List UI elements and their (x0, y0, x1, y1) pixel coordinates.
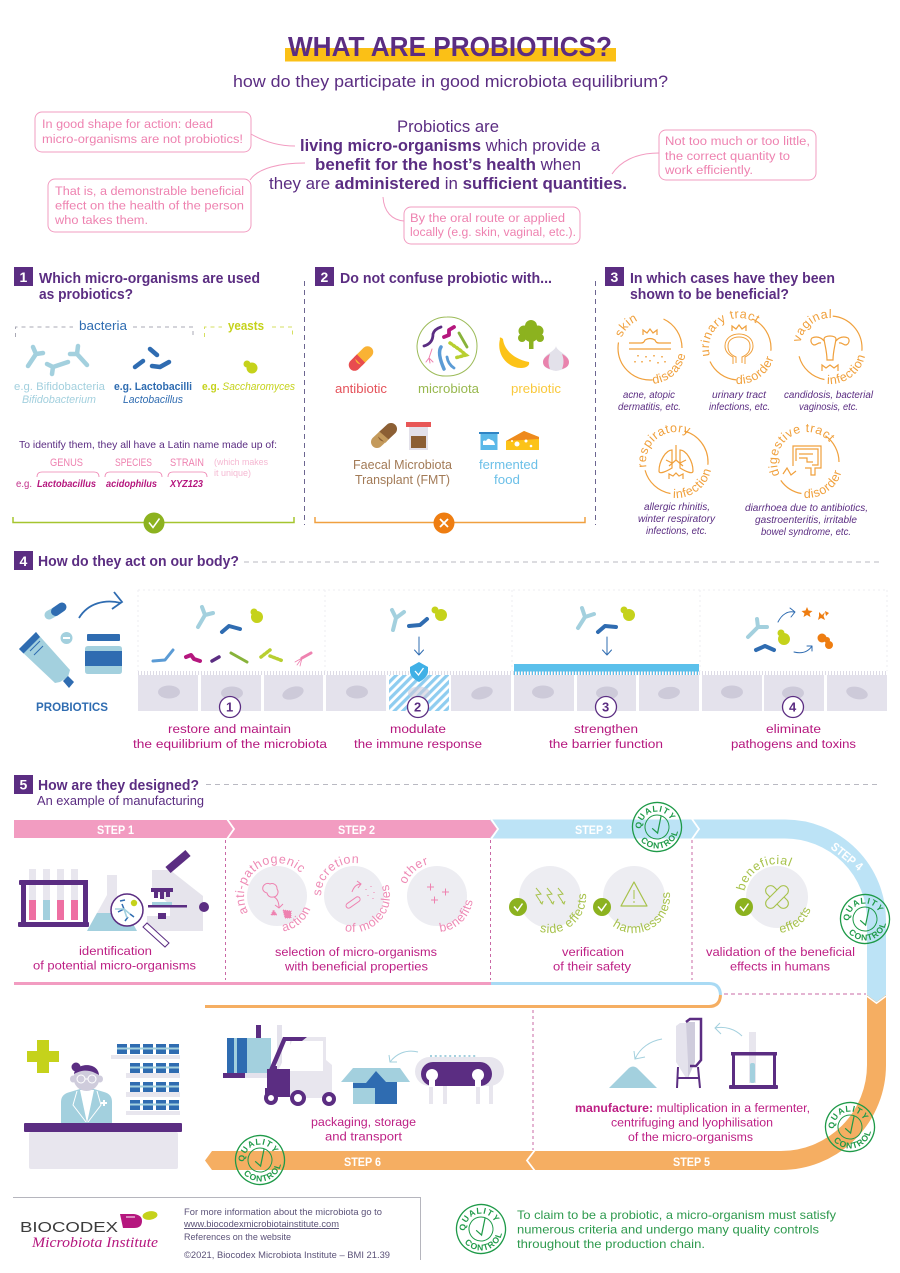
definition text: they are administered in sufficient quantities. (269, 175, 627, 193)
section 5 heading: How are they designed? (38, 778, 199, 794)
step labels: STEP 2 (338, 823, 375, 837)
callout: demonstrable effect: That is, a demonstrable beneficial (55, 184, 244, 198)
label (731, 722, 856, 751)
label: the barrier function (549, 737, 663, 751)
captions: indications: infections, etc. (646, 526, 707, 537)
label: with beneficial properties (284, 960, 428, 974)
callout: correct quantity: work efficiently. (664, 163, 753, 177)
arrow (79, 592, 122, 618)
panel 4.3: barrier function (514, 606, 699, 751)
step labels: STEP 3 (575, 823, 612, 837)
icon: capsule (49, 607, 62, 615)
label: antibiotic: antibiotic (335, 382, 387, 396)
callout: oral route (383, 197, 580, 244)
icon: other benefits: benefits (439, 900, 472, 932)
yeasts bracket: yeasts (228, 318, 264, 333)
panel 4.2: immune response (354, 606, 482, 751)
label (133, 722, 327, 751)
footer text: For more information about the microbiota go to (184, 1207, 382, 1218)
captions: indications: candidosis, bacterial (784, 390, 874, 401)
icon: vaginal infection (794, 309, 865, 384)
label: bifidobacteria: Bifidobacterium (22, 394, 96, 406)
section 1 heading: Which micro-organisms are used (39, 271, 260, 287)
icon: shield (410, 662, 428, 682)
stamp: quality control step 3: CONTROL (642, 832, 678, 848)
footer (13, 1198, 420, 1261)
label: effects in humans (730, 960, 830, 974)
subtitle: how do they participate in good microbiota equilibrium? (233, 72, 668, 91)
step number 4 (782, 696, 804, 718)
green validation bar (13, 512, 294, 534)
callout: correct quantity (612, 130, 816, 180)
captions: indications: infections, etc. (709, 402, 770, 413)
icon: vaginal infection: infection (828, 355, 865, 384)
pathogens (802, 607, 833, 649)
icon: microscope (147, 853, 209, 931)
section 4 heading: How do they act on our body? (38, 554, 239, 570)
microbes (392, 610, 427, 655)
icon: skin disease (616, 316, 685, 384)
step number 2 (408, 696, 428, 718)
callout: dead micro-organisms (35, 112, 295, 152)
logo: Biocodex: Microbiota Institute (31, 1235, 159, 1251)
callout: oral route: locally (e.g. skin, vaginal, etc.). (410, 225, 576, 239)
barrier layer (514, 664, 699, 673)
icon: other benefits: other (401, 858, 426, 884)
panel: step 5 manufacture (575, 1019, 810, 1144)
label: lactobacilli (114, 381, 192, 406)
latin name explanation (16, 439, 277, 490)
label: strengthen (574, 722, 638, 736)
step number 4: 4 (789, 700, 797, 714)
shelves with products (111, 1044, 180, 1115)
stamp: footer quality control: CONTROL (466, 1234, 502, 1250)
section 1 heading: as probiotics? (39, 287, 133, 303)
section 2 heading: 2 (320, 269, 328, 285)
definition text: benefit for the host’s health when (315, 156, 581, 174)
label: FMT: Transplant (FMT) (355, 473, 450, 487)
icon: harmlessness: harmlessness (613, 892, 670, 934)
icon: beneficial effects: effects (780, 908, 810, 932)
icon: fermenter (676, 1019, 701, 1088)
icon: skin disease: disease (652, 354, 685, 384)
icon: harmlessness (603, 866, 670, 934)
footer text: www.biocodexmicrobiotainstitute.com (183, 1219, 339, 1230)
latin name explanation: (which makes (214, 457, 268, 467)
label: modulate (390, 722, 446, 736)
logo: Biocodex (20, 1210, 159, 1251)
stamp: quality control step 6: CONTROL (244, 1164, 281, 1182)
band: step 4 and 3 (490, 829, 876, 995)
label: bifidobacteria: e.g. Bifidobacteria (14, 381, 106, 393)
icon: anti-pathogenic action: anti-pathogenic (235, 856, 304, 914)
section 3 heading: In which cases have they been (630, 271, 835, 287)
section 1 heading (14, 267, 260, 303)
panel 4.1: restore equilibrium (133, 607, 327, 751)
footer text (183, 1207, 390, 1261)
counter (24, 1123, 182, 1169)
icon: check beneficial (735, 898, 753, 916)
icon: flask (87, 875, 137, 931)
stamp: quality control step 4 (840, 894, 890, 944)
panel 2: do not confuse (315, 317, 585, 534)
section 4 heading (14, 551, 882, 570)
icon: bifidobacteria (28, 346, 87, 374)
icon: green cross (27, 1040, 59, 1073)
label: validation of the beneficial (706, 945, 855, 959)
callout: correct quantity: Not too much or too little, (665, 134, 810, 148)
captions: indications: urinary tract (712, 390, 767, 401)
icon: check side effects (509, 898, 527, 916)
step number 1: 1 (226, 700, 233, 714)
label: the equilibrium of the microbiota (133, 737, 327, 751)
callout: correct quantity: the correct quantity to (665, 149, 790, 163)
captions: indications: gastroenteritis, irritable (755, 515, 857, 526)
icon: side effects (519, 866, 586, 934)
latin name explanation: e.g. (16, 478, 32, 490)
icon: respiratory infection: respiratory (639, 425, 690, 467)
callout: demonstrable effect: effect on the health of the person (55, 198, 244, 212)
icon: test tube rack (18, 869, 89, 927)
panel 4.4: eliminate pathogens (731, 607, 856, 751)
stamp: quality control step 5: QUALITY (828, 1106, 869, 1128)
icon: powder pile (609, 1066, 657, 1088)
icon: test tube rack (729, 1032, 778, 1089)
panel: step 4 validation (706, 855, 855, 974)
connecting rounded line (14, 982, 491, 985)
icon: other benefits (401, 858, 472, 932)
step labels: STEP 6 (344, 1155, 381, 1169)
icon: pharmacist (61, 1062, 112, 1123)
icon: urinary tract disorder: urinary tract (700, 310, 760, 356)
stamp: quality control step 6: QUALITY (238, 1138, 279, 1162)
callout: demonstrable effect (48, 163, 305, 232)
panel 3: indications (616, 309, 874, 538)
label: FMT (353, 458, 452, 487)
icon: yogurt and cheese (479, 431, 539, 450)
callout: demonstrable effect: who takes them. (54, 213, 148, 227)
footer note: numerous criteria and undergo many quality controls (517, 1222, 819, 1236)
label: fermented food (479, 458, 538, 487)
latin name explanation: acidophilus (106, 478, 157, 490)
label: and transport (325, 1130, 403, 1144)
panel: step 1 identification (18, 853, 209, 972)
step number 2: 2 (414, 700, 421, 714)
step labels: STEP 4 (828, 839, 866, 874)
latin name explanation: XYZ123 (169, 478, 203, 490)
microbes (748, 608, 812, 653)
yeasts bracket (204, 318, 292, 337)
callout: oral route: By the oral route or applied (410, 211, 565, 225)
stamp: quality control step 4: CONTROL (850, 924, 886, 940)
stamp: quality control step 5 (824, 1102, 876, 1152)
microbes (578, 608, 616, 655)
icon: tablet (60, 632, 72, 644)
icon: forklift (223, 1025, 334, 1104)
stamp: quality control step 4: QUALITY (844, 898, 884, 920)
logo: Biocodex: BIOCODEX (20, 1220, 118, 1236)
icon: secretion of molecules: of molecules (346, 885, 390, 932)
stamp: footer quality control: QUALITY (460, 1208, 500, 1230)
icon: digestive tract disorder: digestive tract (768, 424, 834, 476)
section 5 heading: 5 (20, 776, 28, 792)
section 5 heading (14, 775, 880, 808)
captions: indications (618, 390, 874, 538)
title: WHAT ARE PROBIOTICS? (288, 31, 612, 62)
icon: antibiotic capsule (354, 352, 368, 365)
footer note: To claim to be a probiotic, a micro-organism must satisfy (517, 1208, 836, 1222)
icon: tube (19, 632, 74, 688)
captions: indications: bowel syndrome, etc. (761, 527, 851, 538)
label: fermented food: food (494, 473, 520, 487)
icon: microbiota (417, 317, 477, 376)
icon: jar (85, 634, 122, 674)
label: verification (562, 945, 624, 959)
captions: indications: vaginosis, etc. (799, 402, 858, 413)
icon: secretion of molecules (314, 856, 390, 932)
label: FMT: Faecal Microbiota (353, 458, 452, 472)
icon: urinary tract disorder (700, 310, 773, 384)
label: probiotics: PROBIOTICS (36, 700, 108, 714)
icon: respiratory infection: infection (674, 469, 711, 498)
panel 1: micro-organisms (13, 318, 295, 534)
icon: check harmlessness (593, 898, 611, 916)
latin name explanation: GENUS (50, 457, 83, 469)
latin name explanation: STRAIN (170, 457, 204, 469)
band: steps 1 and 2 (14, 820, 497, 838)
icon: conveyor (415, 1056, 504, 1104)
icon: vaginal infection: vaginal (794, 309, 831, 341)
stamp: footer quality control (456, 1204, 506, 1254)
latin name explanation: SPECIES (115, 457, 152, 469)
bacteria bracket: bacteria (79, 318, 128, 333)
panel: pharmacy (24, 1040, 182, 1169)
band: step 6 and 5 (212, 994, 876, 1160)
icon: box (341, 1068, 410, 1104)
label: fermented food: fermented (479, 458, 538, 472)
captions: indications: acne, atopic (623, 390, 675, 401)
step labels (97, 823, 866, 1169)
section 4 heading: 4 (20, 553, 28, 569)
latin name explanation: it unique) (214, 468, 251, 478)
label: microbiota: microbiota (418, 382, 479, 396)
step number 1 (220, 696, 240, 718)
step number 3 (596, 696, 616, 718)
label: eliminate (766, 722, 821, 736)
footer text: ©2021, Biocodex Microbiota Institute – BMI 21.39 (184, 1250, 390, 1261)
icon: lactobacilli (135, 349, 169, 367)
icon: side effects: side effects (540, 894, 586, 934)
label (549, 722, 663, 751)
captions: indications: winter respiratory (638, 514, 716, 525)
section 3 heading (605, 267, 835, 303)
icon: probiotic products (19, 592, 122, 714)
label: centrifuging and lyophilisation (611, 1116, 773, 1130)
latin name explanation: Lactobacillus (37, 478, 96, 490)
icon: beneficial effects: beneficial (736, 855, 792, 890)
footer note (517, 1208, 836, 1251)
icon: urinary tract disorder: disorder (736, 356, 773, 384)
section 2 heading: Do not confuse probiotic with... (340, 271, 552, 287)
definition text: living micro-organisms which provide a (300, 137, 601, 155)
definition text: Probiotics are (397, 118, 499, 136)
label: of potential micro-organisms (33, 958, 196, 972)
latin name explanation: To identify them, they all have a Latin name made up of: (19, 439, 277, 451)
section 1 heading: 1 (20, 269, 28, 285)
section 3 heading: 3 (610, 269, 618, 285)
icon: anti-pathogenic action: action (282, 907, 310, 932)
orange warning bar (315, 512, 585, 534)
label: of their safety (553, 960, 632, 974)
definition text (269, 118, 627, 193)
stamp: quality control step 3 (632, 802, 682, 852)
icon: FMT capsule and cup (377, 422, 431, 450)
label: lactobacilli: e.g. Lactobacilli (114, 381, 192, 393)
stamp: quality control step 3: QUALITY (636, 806, 676, 828)
arrow (634, 1039, 662, 1059)
label: saccharomyces: e.g. Saccharomyces (202, 381, 295, 393)
step labels: STEP 5 (673, 1155, 710, 1169)
icon: skin disease: skin (616, 316, 637, 337)
label (553, 945, 632, 974)
label: identification (79, 944, 152, 958)
microbes (153, 607, 311, 666)
label: pathogens and toxins (731, 737, 856, 751)
label: packaging, storage (311, 1115, 416, 1129)
callout: dead micro-organisms: In good shape for action: dead (42, 117, 213, 131)
label (311, 1115, 416, 1144)
label: of the micro-organisms (628, 1130, 753, 1144)
epithelium cells (138, 673, 887, 711)
label: prebiotic: prebiotic (511, 382, 561, 396)
captions: indications: diarrhoea due to antibiotics, (745, 503, 868, 514)
footer note: throughout the production chain. (517, 1237, 705, 1251)
label: bifidobacteria (14, 381, 106, 406)
label (33, 944, 196, 972)
label: the immune response (354, 737, 482, 751)
icon: digestive tract disorder (768, 424, 841, 498)
panel: step 6 packaging (223, 1025, 504, 1144)
step number 3: 3 (602, 700, 609, 714)
label: lactobacilli: Lactobacillus (123, 394, 183, 406)
label: restore and maintain (168, 722, 291, 736)
panel: step 3 verification (509, 866, 670, 974)
footer text: References on the website (184, 1232, 291, 1243)
arrow (715, 1023, 742, 1036)
process bands (14, 819, 886, 1171)
icon: respiratory infection (639, 425, 711, 498)
callout: dead micro-organisms: micro-organisms are not probiotics! (42, 132, 243, 146)
icon: digestive tract disorder: disorder (804, 470, 841, 498)
step labels: STEP 1 (97, 823, 134, 837)
label (354, 722, 482, 751)
stamp: quality control step 6 (234, 1134, 286, 1186)
label: selection of micro-organisms (275, 945, 437, 959)
label (575, 1101, 810, 1144)
icon: prebiotic foods (499, 320, 569, 371)
captions: indications: dermatitis, etc. (618, 402, 681, 413)
panel: step 2 selection (235, 856, 472, 974)
label (275, 945, 437, 974)
icon: yeast (244, 360, 258, 374)
arrow (389, 1051, 418, 1062)
stamp: quality control step 5: CONTROL (834, 1132, 871, 1148)
icon: magnifying glass (111, 894, 169, 947)
label (706, 945, 855, 974)
label: manufacture: multiplication in a fermenter, (575, 1101, 810, 1115)
icon: beneficial effects (736, 855, 810, 932)
captions: indications: allergic rhinitis, (644, 502, 710, 513)
icon: secretion of molecules: secretion (314, 856, 358, 896)
section 5 heading: An example of manufacturing (37, 794, 204, 808)
section 3 heading: shown to be beneficial? (630, 287, 789, 303)
bacteria bracket (16, 318, 193, 337)
